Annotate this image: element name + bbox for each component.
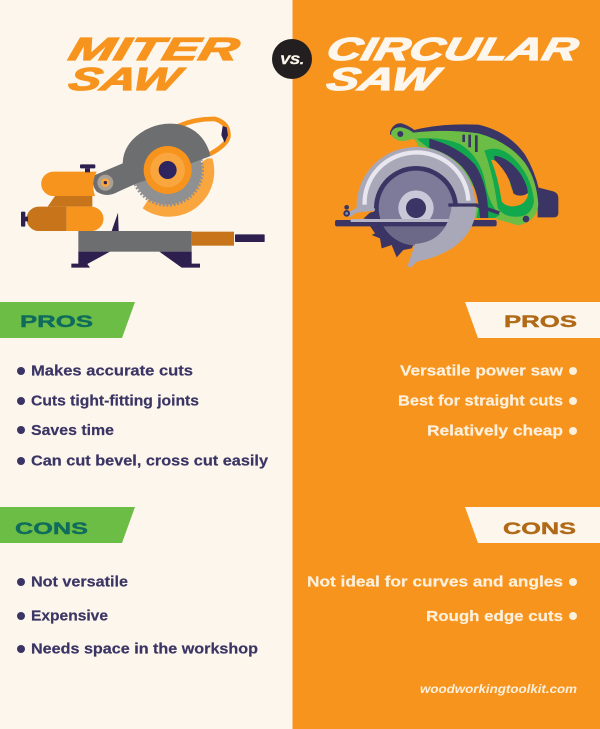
saw teeth — [370, 225, 413, 257]
banner: miter cons: CONS — [15, 520, 88, 538]
list: miter pros: Saves time — [31, 422, 114, 439]
fence — [112, 213, 119, 231]
pivot — [97, 175, 113, 191]
inner navy arc — [429, 139, 488, 218]
title: circular saw: SAW — [323, 61, 446, 97]
hub — [144, 146, 192, 194]
handle window — [491, 160, 528, 206]
banner: miter pros — [0, 302, 135, 338]
title: miter saw — [65, 31, 244, 97]
blade — [374, 166, 458, 219]
list: circular pros — [398, 362, 577, 440]
vents — [462, 135, 465, 142]
handle ring — [484, 149, 534, 217]
list: miter pros: Can cut bevel, cross cut easily — [31, 452, 269, 470]
motor housing — [41, 172, 97, 196]
list: circular cons: Not ideal for curves and angles — [307, 574, 563, 590]
baseplate — [335, 220, 497, 226]
title: miter saw: SAW — [65, 61, 188, 97]
handle — [178, 119, 228, 154]
banner: circular pros: PROS — [504, 313, 577, 331]
light green shell — [391, 127, 538, 225]
bolts — [397, 131, 403, 137]
blade guard orange — [143, 158, 214, 217]
list: circular pros: Best for straight cuts — [398, 392, 563, 410]
badge: vs — [272, 39, 312, 79]
title: miter saw: MITER — [65, 31, 244, 67]
banner: miter cons — [0, 507, 135, 543]
battery — [538, 187, 558, 217]
saw body — [390, 123, 558, 225]
guard lever — [448, 203, 500, 215]
lower motor — [26, 207, 67, 231]
blade and guards — [335, 147, 500, 267]
handle grip — [494, 156, 528, 196]
list: miter pros: Makes accurate cuts — [31, 362, 193, 380]
lower guard — [407, 207, 477, 267]
banner: miter pros: PROS — [20, 313, 93, 331]
title: circular saw: CIRCULAR — [323, 31, 583, 67]
bright green band — [417, 138, 500, 218]
list: miter cons: Needs space in the workshop — [31, 640, 258, 658]
upper guard — [357, 147, 475, 209]
list: miter pros: Cuts tight-fitting joints — [31, 392, 199, 410]
banner: circular cons — [465, 507, 600, 543]
top navy crescent — [390, 123, 539, 205]
icon: miter saw — [21, 119, 265, 268]
blade — [133, 135, 202, 205]
list: miter cons: Not versatile — [31, 574, 128, 590]
list: miter cons — [17, 574, 258, 658]
feet — [71, 252, 110, 268]
list: miter cons: Expensive — [31, 608, 108, 624]
title: circular saw — [323, 31, 583, 97]
base — [78, 231, 192, 252]
website credit: woodworkingtoolkit.com — [420, 684, 577, 696]
list: circular cons: Rough edge cuts — [426, 608, 563, 625]
nose guard — [347, 207, 375, 217]
banner: circular cons: CONS — [503, 520, 576, 538]
list: circular cons — [307, 574, 577, 625]
panel: miter saw background — [0, 0, 293, 729]
list: miter pros — [17, 362, 269, 470]
icon: circular saw — [335, 123, 558, 267]
guard highlight — [365, 152, 468, 205]
upper guard and arm — [93, 124, 211, 195]
banner: circular pros — [465, 302, 600, 338]
badge: vs: VS. — [280, 53, 304, 67]
panel: circular saw background — [292, 0, 600, 729]
list: circular pros: Versatile power saw — [400, 362, 563, 380]
list: circular pros: Relatively cheap — [427, 422, 563, 440]
